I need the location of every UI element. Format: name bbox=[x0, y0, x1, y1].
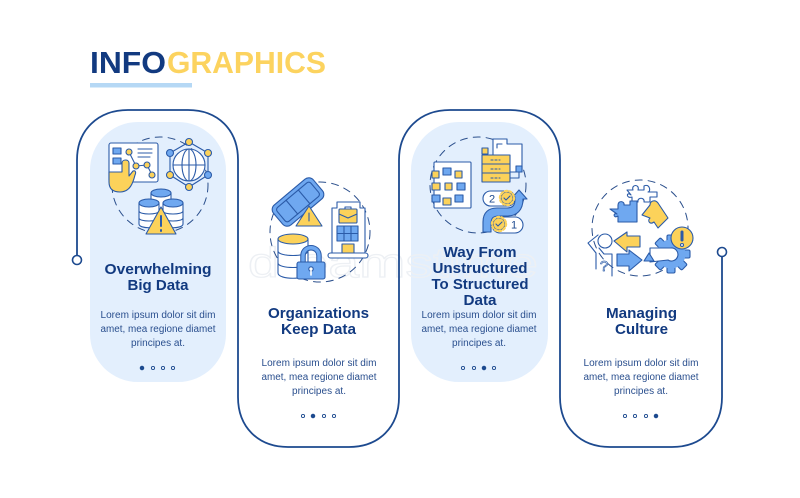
text block: column 3: principes at. bbox=[452, 338, 506, 349]
text block: column 2: principes at. bbox=[292, 386, 346, 397]
text block: column 4 bbox=[584, 358, 699, 397]
pagination dots: column 4 bbox=[623, 414, 658, 418]
left connector node bbox=[72, 256, 82, 264]
text block: column 1: Lorem ipsum dolor sit dim bbox=[100, 310, 216, 321]
watermark: dreamstime bbox=[248, 239, 538, 286]
pagination dots: column 3 bbox=[461, 366, 496, 370]
heading: way from unstructured to structured data bbox=[432, 244, 528, 309]
heading: overwhelming big data bbox=[104, 261, 212, 294]
icon: structured data bbox=[430, 137, 527, 233]
connected outline bbox=[77, 110, 722, 447]
heading: organizations keep data: Keep Data bbox=[281, 321, 357, 338]
panel: column 3 background bbox=[411, 122, 548, 382]
heading: managing culture bbox=[606, 305, 677, 338]
title underline bbox=[90, 83, 192, 88]
icon: managing culture: ? bbox=[600, 258, 608, 275]
icon: big data bbox=[109, 137, 212, 234]
icon: managing culture bbox=[588, 180, 693, 276]
text block: column 4: principes at. bbox=[614, 386, 668, 397]
heading: way from unstructured to structured data: Way From bbox=[444, 244, 516, 261]
right connector node bbox=[718, 248, 726, 256]
heading: managing culture: Managing bbox=[606, 305, 677, 322]
heading: organizations keep data: Organizations bbox=[268, 305, 369, 322]
icon: structured data: 2 bbox=[489, 194, 495, 206]
heading: overwhelming big data: Big Data bbox=[128, 277, 189, 294]
title: INFO bbox=[90, 45, 166, 80]
heading: way from unstructured to structured data: Unstructured bbox=[432, 260, 528, 277]
text block: column 3: Lorem ipsum dolor sit dim bbox=[422, 310, 536, 321]
text block: column 1 bbox=[100, 310, 216, 349]
panel: column 1 background bbox=[90, 122, 226, 382]
pagination dots: column 1 bbox=[140, 366, 175, 370]
icon: organizations keep data bbox=[270, 175, 370, 282]
heading: way from unstructured to structured data: To Structured bbox=[432, 276, 528, 293]
text block: column 4: Lorem ipsum dolor sit dim bbox=[584, 358, 698, 369]
text block: column 1: amet, mea regione diamet bbox=[100, 324, 216, 335]
title bbox=[90, 45, 326, 80]
heading: managing culture: Culture bbox=[615, 321, 668, 338]
text block: column 1: principes at. bbox=[131, 338, 185, 349]
pagination dots: column 2 bbox=[301, 414, 336, 418]
heading: overwhelming big data: Overwhelming bbox=[104, 261, 212, 278]
heading: organizations keep data bbox=[268, 305, 369, 338]
text block: column 3 bbox=[422, 310, 537, 349]
title: GRAPHICS bbox=[167, 45, 326, 80]
text block: column 4: amet, mea regione diamet bbox=[584, 372, 699, 383]
icon: structured data: 1 bbox=[511, 220, 517, 232]
text block: column 3: amet, mea regione diamet bbox=[422, 324, 537, 335]
text block: column 2: Lorem ipsum dolor sit dim bbox=[262, 358, 376, 369]
text block: column 2: amet, mea regione diamet bbox=[262, 372, 377, 383]
text block: column 2 bbox=[262, 358, 377, 397]
heading: way from unstructured to structured data: Data bbox=[464, 292, 497, 309]
